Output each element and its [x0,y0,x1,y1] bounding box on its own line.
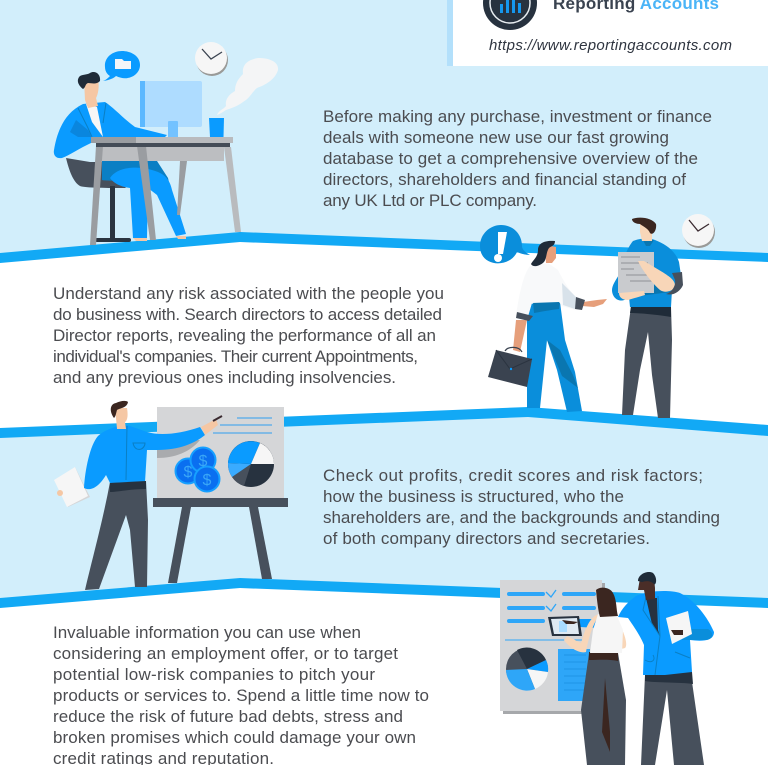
head and hair [78,72,100,108]
paragraph: profits and credit: how the business is structured, who the [323,487,624,506]
intro paragraph: database to get a comprehensive overview of the [323,149,698,168]
chair [66,158,157,242]
illustration: presenter at board [54,401,288,590]
exclamation bubble [480,225,530,263]
paragraph: director risk: do business with. Search directors to access detailed [53,305,442,324]
shirt and arm [57,416,222,496]
paragraph: profits and credit [323,466,720,548]
paragraph: invaluable information: broken promises which could damage your own [53,728,416,747]
trousers [85,481,148,590]
paragraph: invaluable information: potential low-risk companies to pitch your [53,665,375,684]
paragraph: invaluable information [53,623,429,765]
paragraph: invaluable information: considering an employment offer, or to target [53,644,398,663]
intro paragraph: deals with someone new use our fast growing [323,128,669,147]
intro paragraph: directors, shareholders and financial standing of [323,170,686,189]
coins: $ [184,464,193,481]
coins: $ [199,453,208,470]
band 2 [0,407,768,438]
paragraph: director risk: individual's companies. Their current Appointments, [53,347,418,366]
band 3 [0,578,768,608]
desk [90,137,241,245]
paragraph: profits and credit: shareholders are, and the backgrounds and standing [323,508,720,527]
pie chart [228,441,274,487]
illustration: two people reviewing report [500,572,714,765]
cup and steam [209,58,278,137]
clock [682,214,715,248]
band 1 [0,232,768,263]
paragraph: invaluable information: products or services to. Spend a little time now to [53,686,429,705]
presentation board [153,407,288,583]
intro paragraph: Before making any purchase, investment or finance [323,107,712,126]
briefcase [488,347,532,387]
paragraph: invaluable information: Invaluable information you can use when [53,623,361,642]
speech bubble with folder [103,51,140,81]
paragraph: director risk: Director reports, revealing the performance of all an [53,326,436,345]
paragraph: profits and credit: Check out profits, credit scores and risk factors; [323,466,703,485]
header panel [447,0,768,66]
paragraph: director risk [53,284,444,387]
head [111,401,128,429]
monitor [140,81,202,138]
legs [102,161,186,241]
report pie chart [506,648,548,691]
paragraph: profits and credit: of both company directors and secretaries. [323,529,650,548]
paragraph: director risk: Understand any risk associated with the people you [53,284,444,303]
report document [500,580,605,714]
woman [488,241,607,412]
website url: https://www.reportingaccounts.com [489,37,732,54]
coins [176,448,220,492]
logo [483,0,537,30]
coins: $ [203,472,212,489]
torso and arm [54,102,167,158]
man holding paper [612,218,683,418]
intro paragraph: any UK Ltd or PLC company. [323,191,537,210]
intro paragraph [323,107,712,210]
paragraph: invaluable information: reduce the risk of future bad debts, stress and [53,707,403,726]
paragraph: director risk: and any previous ones including insolvencies. [53,368,396,387]
wall clock [195,42,228,76]
man in blazer [578,572,714,765]
illustration: man at desk [54,42,278,245]
illustration: woman and man talking [480,214,715,418]
woman from behind [564,588,626,765]
tablet [548,616,582,636]
paper held [54,467,90,507]
